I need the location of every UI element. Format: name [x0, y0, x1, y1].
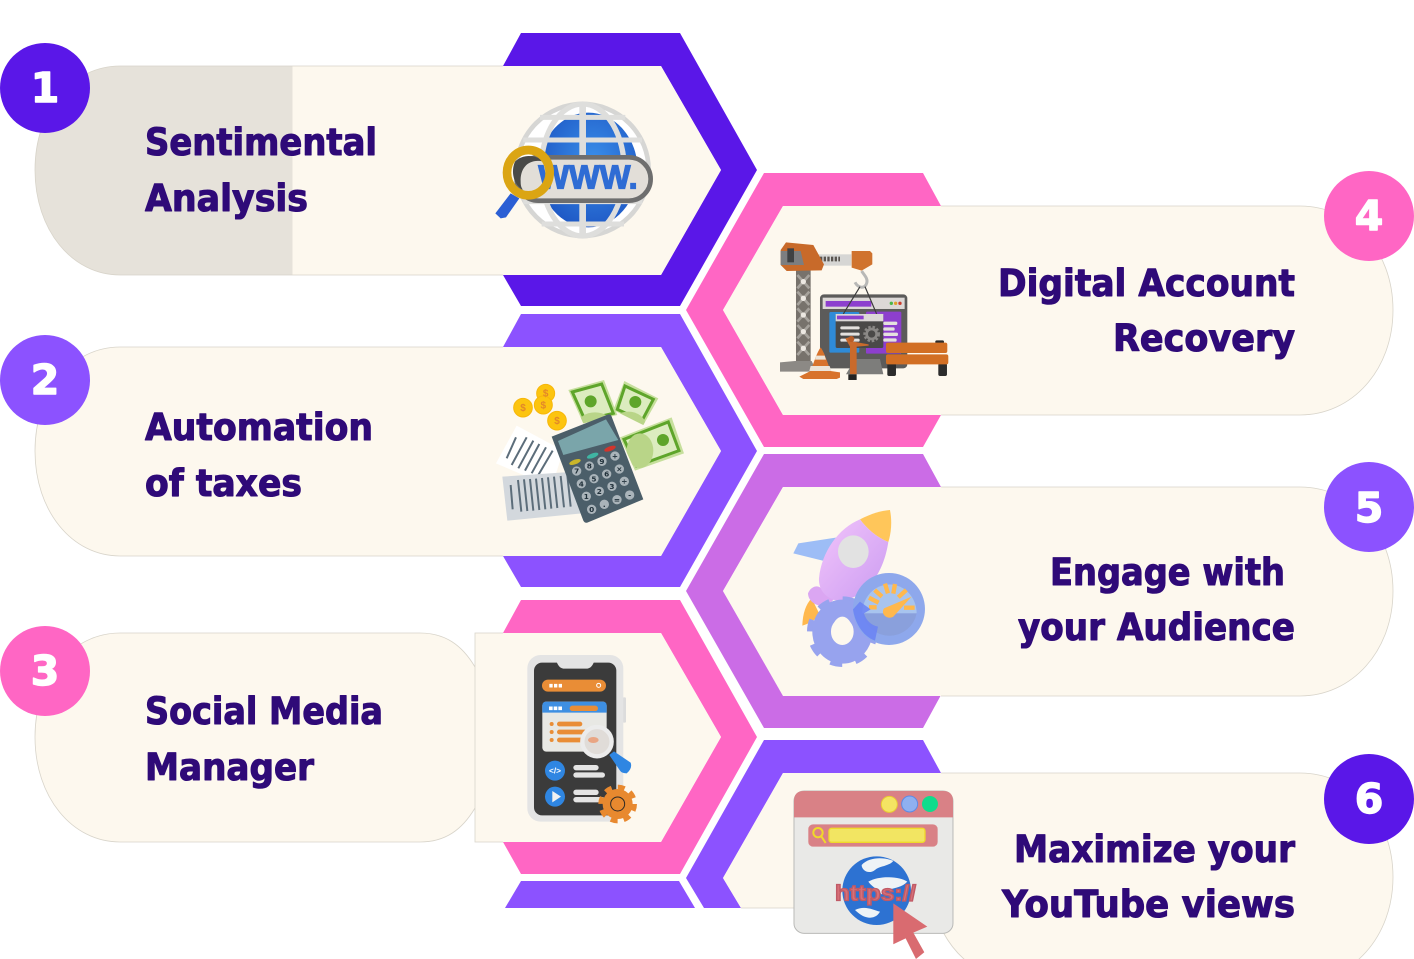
panel 4: Digital Account Recovery [686, 173, 1393, 447]
card 1 outline [35, 66, 503, 275]
heading 3: Social Media [145, 690, 383, 733]
icon: www globe with magnifier: WWW. [538, 160, 638, 197]
badge 2: 2 [31, 356, 59, 404]
panel 1: Sentimental Analysis [35, 33, 757, 306]
card 3 [35, 633, 721, 842]
heading 6: YouTube views [1001, 883, 1295, 926]
heading 2: Automation [145, 406, 373, 449]
icon: calculator, money and receipts: 5 [591, 474, 597, 483]
badge 5: 5 [1355, 484, 1383, 532]
panel 6: Maximize your YouTube views [686, 740, 1393, 959]
icon: calculator, money and receipts [496, 380, 684, 523]
icon: calculator, money and receipts: = [614, 495, 620, 504]
icon: calculator, money and receipts: ÷ [621, 477, 627, 486]
hex frame 5 [686, 454, 941, 728]
heading 4: Recovery [1113, 317, 1295, 360]
icon: calculator, money and receipts: $ [554, 416, 560, 427]
badge 5 [1324, 462, 1414, 552]
badge 4: 4 [1355, 192, 1383, 240]
heading 1: Sentimental [145, 121, 377, 164]
icon: calculator, money and receipts: 3 [609, 482, 615, 491]
badge 1 [0, 43, 90, 133]
heading 5: Engage with [1050, 551, 1285, 594]
icon: calculator, money and receipts: 7 [574, 467, 579, 476]
card 2 [35, 347, 721, 556]
icon: calculator, money and receipts: $ [520, 403, 526, 414]
card 2 outline [35, 347, 503, 556]
heading 5: your Audience [1018, 606, 1295, 649]
icon: browser window with globe and cursor: https:// [835, 880, 916, 905]
hex frame 6 [686, 740, 941, 908]
card 6 [723, 773, 1393, 959]
icon: calculator, money and receipts: + [612, 452, 618, 461]
icon: calculator, money and receipts: 6 [604, 470, 609, 479]
badge 4 [1324, 171, 1414, 261]
badge 6: 6 [1355, 775, 1383, 823]
icon: calculator, money and receipts: 2 [597, 487, 602, 496]
icon: calculator, money and receipts: × [616, 465, 622, 474]
card 3 outline [35, 633, 503, 842]
heading 4: Digital Account [998, 262, 1295, 305]
icon: calculator, money and receipts: 1 [584, 492, 589, 501]
hex frame 4 [686, 173, 941, 447]
badge 6 [1324, 754, 1414, 844]
icon: calculator, money and receipts: $ [541, 400, 547, 411]
card 4 outline [941, 206, 1393, 415]
icon: rocket, gear and speedometer [793, 510, 925, 662]
hex frame 2 [503, 314, 757, 587]
hex frame 1 [503, 33, 757, 306]
card 4 [723, 206, 1393, 415]
hex frame 3 [503, 600, 757, 874]
icon: www globe with magnifier [495, 103, 651, 237]
panel 5: Engage with your Audience [686, 454, 1393, 728]
icon: calculator, money and receipts: . [603, 500, 606, 509]
badge 2 [0, 335, 90, 425]
icon: calculator, money and receipts: 4 [579, 479, 584, 488]
lower violet trapezoid [505, 881, 695, 908]
icon: smartphone with magnifier and gear: </> [549, 766, 561, 776]
card 1 [35, 66, 721, 275]
icon: calculator, money and receipts: $ [543, 389, 549, 400]
badge 3 [0, 626, 90, 716]
icon: smartphone with magnifier and gear [527, 655, 634, 822]
shaded band 1 [35, 66, 292, 275]
icon: calculator, money and receipts: - [628, 491, 631, 500]
card 5 [723, 487, 1393, 696]
icon: browser window with globe and cursor [794, 791, 953, 959]
icon: crane lifting a web page [780, 242, 948, 380]
icon: calculator, money and receipts: 0 [589, 505, 594, 514]
heading 6: Maximize your [1014, 828, 1296, 871]
heading 3: Manager [145, 746, 315, 789]
card 6 outline [741, 773, 1393, 959]
badge 1: 1 [31, 64, 59, 112]
card 5 outline [941, 487, 1393, 696]
panel 2: Automation of taxes [35, 314, 757, 587]
heading 2: of taxes [145, 462, 302, 505]
panel 3: Social Media Manager [35, 600, 757, 874]
icon: calculator, money and receipts: 9 [599, 457, 605, 466]
icon: calculator, money and receipts: 8 [587, 462, 592, 471]
heading 1: Analysis [145, 177, 308, 220]
badge 3: 3 [31, 647, 59, 695]
